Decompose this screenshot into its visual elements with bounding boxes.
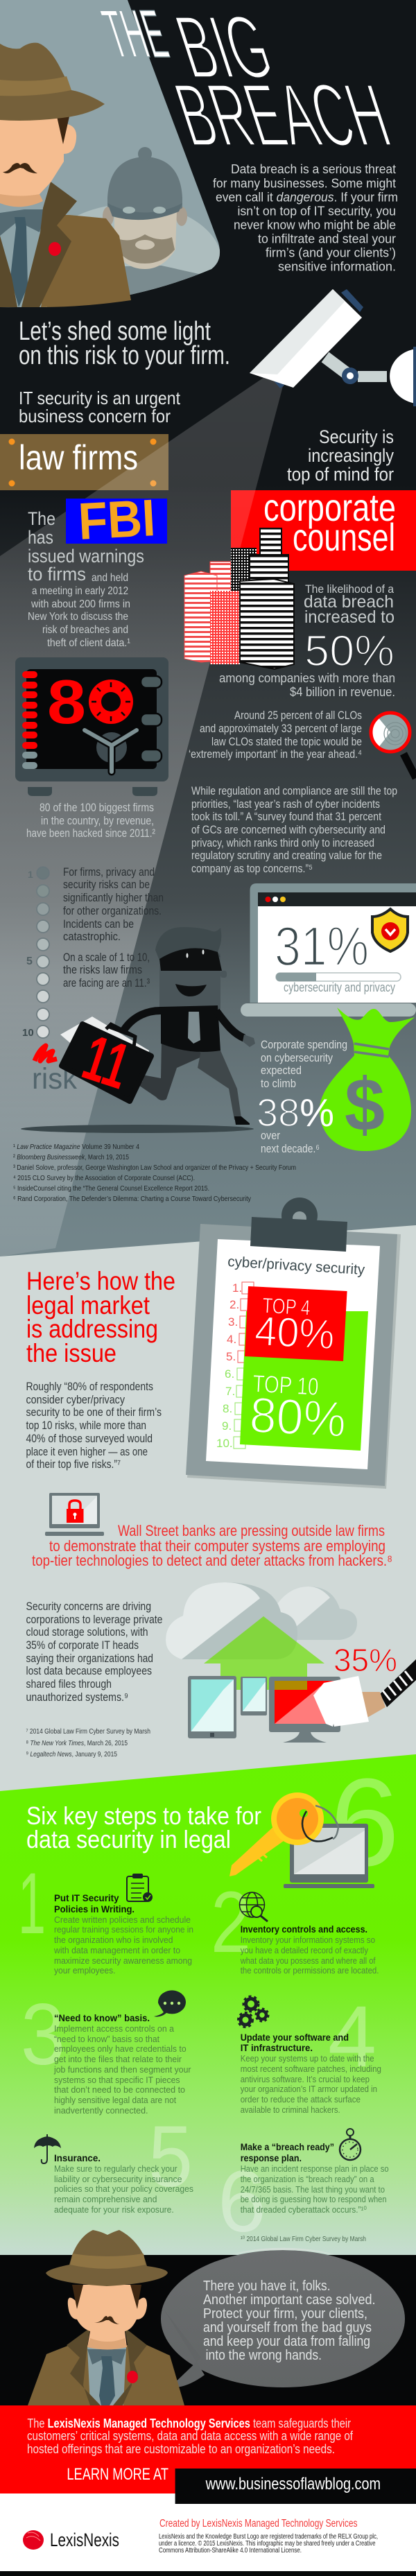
text: regulation and compliance: company as top concerns.”⁵ — [191, 863, 313, 875]
text: security concerns cloud storage: 35% of corporate IT heads — [26, 1639, 139, 1652]
detective figure — [0, 43, 131, 307]
footnotes 1 to 6: ³ Daniel Solove, professor, George Washington Law School and organizer of the Privacy + Security Forum — [13, 1164, 296, 1172]
about LexisNexis text: customers’ critical systems, data and data access with a wide range of — [27, 2429, 354, 2443]
step 1: written policies — [53, 1874, 193, 1976]
red scribble 11th level — [35, 1046, 57, 1061]
step 4: update software: available to criminal hackers. — [241, 2104, 340, 2115]
about LexisNexis text: hosted offerings that are customizable to an organization’s needs. — [27, 2442, 335, 2456]
data breach statistic: 50%: 50% — [304, 627, 395, 675]
heading: how the legal market addresses the issue: Here’s how the — [26, 1267, 175, 1295]
icon: globe with magnifier — [240, 1892, 268, 1921]
website link box: www.businessoflawblog.com — [205, 2475, 381, 2493]
checklist numbers — [216, 1281, 242, 1450]
mustache — [94, 2316, 119, 2324]
checklist numbers: 1. — [232, 1281, 242, 1295]
closing text: and keep your data from falling — [203, 2334, 370, 2349]
corporate counsel banner label — [263, 485, 396, 559]
step 4: update software: order to reduce the attack surface — [241, 2094, 361, 2104]
FBI warning text — [28, 508, 144, 649]
bottom black bar — [0, 2571, 416, 2576]
icon: laptop with padlock — [45, 1493, 104, 1536]
text: roughly 80% of respondents: consider cyber/privacy — [26, 1394, 125, 1406]
text: security concerns cloud storage: cloud storage solutions, with — [26, 1626, 148, 1639]
fedora hat — [0, 43, 105, 121]
about LexisNexis text — [27, 2417, 354, 2456]
text: risks for firms: catastrophic. — [63, 931, 121, 943]
risk scale 1 to 10: 10 — [22, 1027, 34, 1039]
checklist numbers: 8. — [223, 1402, 232, 1415]
step 4: update software: most recent software patches, including — [241, 2064, 381, 2074]
heading: shed some light — [19, 317, 230, 370]
mustache — [3, 163, 37, 173]
heading: six key steps: Six key steps to take for — [26, 1801, 261, 1830]
footer white background — [0, 2493, 416, 2571]
step 4: update software: your organization’s IT armor updated in — [241, 2084, 377, 2094]
step 1: written policies: regular training sessions for anyone in — [54, 1924, 193, 1935]
large ghost numerals: 1 — [18, 1856, 46, 1952]
text: risks for firms: On a scale of 1 to 10, — [63, 951, 150, 964]
step 2: inventory controls: you have a detailed record of exactly — [241, 1945, 368, 1955]
step 1: written policies: your employees. — [54, 1965, 115, 1976]
step 3: need to know basis: inadvertently connected. — [54, 2105, 148, 2116]
website link box — [175, 2469, 416, 2504]
text: risks for firms: for other organizations. — [63, 905, 162, 917]
text: CLO survey: Around 25 percent of all CLOs — [234, 709, 362, 722]
light beam from camera — [0, 374, 283, 1256]
step 3: need to know basis: employees only have credentials to — [54, 2043, 187, 2054]
banner: law firms background — [0, 434, 168, 490]
icon: money bag: $ — [345, 1062, 385, 1146]
text: security concerns cloud storage: shared files through — [26, 1678, 112, 1691]
text: risks for firms — [63, 866, 164, 989]
closing text: There you have it, folks. — [203, 2279, 330, 2294]
step 6: breach ready response plan: response plan. — [241, 2152, 302, 2163]
step 3: need to know basis — [53, 1990, 191, 2116]
title — [95, 0, 401, 164]
text: regulation and compliance: priorities, “last year’s rash of cyber incidents — [191, 798, 380, 811]
text: regulation and compliance: of GCs are concerned with cybersecurity and — [191, 824, 385, 836]
text: risks for firms: Incidents can be — [63, 918, 134, 931]
FBI warning text: and held — [92, 572, 128, 584]
top 4 stat: 40% — [254, 1308, 336, 1358]
icon: money bag — [320, 1008, 415, 1151]
banner: corporate counsel background — [231, 490, 416, 571]
risk scale 1 to 10 — [22, 867, 49, 1039]
text: corporate spending 38%: on cybersecurity — [261, 1052, 333, 1064]
step 5: insurance: Make sure to regularly check your — [54, 2163, 177, 2174]
checklist numbers: 7. — [225, 1385, 235, 1398]
text: regulation and compliance: took its toll.” A “survey found that 31 percent — [191, 811, 381, 823]
closing text: Another important case solved. — [203, 2292, 376, 2308]
text: CLO survey — [189, 709, 362, 761]
step 3: need to know basis: “need to know” basis so that — [54, 2034, 159, 2044]
text: security concerns cloud storage — [26, 1600, 162, 1704]
text: roughly 80% of respondents: security to be one of their firm’s — [26, 1406, 162, 1419]
checklist numbers: 5. — [226, 1350, 236, 1363]
intro text: to infiltrate and steal your — [258, 232, 396, 246]
learn more label: LEARN MORE AT — [67, 2465, 168, 2484]
callout: Wall Street banks — [32, 1522, 392, 1569]
step 6: breach ready response plan: 24/7/365 basis. The last thing you want to — [241, 2184, 385, 2195]
checklist numbers: 4. — [227, 1333, 236, 1346]
text: CLO survey: law CLOs stated the topic would be — [211, 736, 362, 748]
footnotes 1 to 6: ⁵ InsideCounsel citing the “The General Counsel Excellence Report 2015. — [13, 1184, 209, 1193]
closing text: and yourself from the bad guys — [203, 2320, 372, 2335]
hand holding paper — [313, 1659, 416, 1727]
data breach statistic: 50%: increased to — [304, 607, 395, 627]
text: corporate spending 38%: to climb — [261, 1078, 296, 1090]
clipboard: cyber/privacy security survey: cyber/privacy security — [227, 1254, 365, 1278]
text: security concerns cloud storage: saying their organizations had — [26, 1652, 153, 1665]
text: security concerns cloud storage: corporations to leverage private — [26, 1614, 162, 1626]
text: risk word: risk — [32, 1062, 77, 1096]
text: risks for firms: the risks law firms — [63, 964, 142, 976]
illustration: running man with briefcase: 11 — [75, 1022, 137, 1103]
FBI warning text: a meeting in early 2012 — [32, 585, 128, 597]
text: roughly 80% of respondents — [26, 1381, 162, 1471]
risk scale 1 to 10: 5 — [26, 956, 33, 967]
step 1: written policies: maximize security awareness among — [54, 1955, 192, 1966]
step 3: need to know basis: that don’t need to be connected to — [54, 2084, 185, 2095]
text: 80 of 100 firms hacked — [26, 802, 155, 840]
text: roughly 80% of respondents: top 10 risks, while more than — [26, 1419, 146, 1432]
intro text: sensitive information. — [278, 260, 396, 274]
step 4: update software: Update your software and — [241, 2032, 349, 2043]
FBI warning text: with about 200 firms in — [31, 598, 130, 610]
step 2: inventory controls: the controls or permissions are located. — [241, 1965, 379, 1976]
closing text: Protect your firm, your clients, — [203, 2306, 367, 2322]
step 1: written policies: Put IT Security — [54, 1892, 119, 1903]
risk scale 1 to 10: 1 — [28, 869, 33, 880]
speech bubble closing — [161, 2248, 405, 2387]
checklist numbers: 9. — [222, 1419, 232, 1433]
data breach statistic: 50% — [219, 582, 395, 699]
briefcase — [62, 1024, 151, 1101]
step 5: insurance: adequate for your risk exposure. — [54, 2204, 174, 2215]
FBI warning text: The — [28, 508, 55, 529]
text: 80 of 100 firms hacked: 80 of the 100 biggest firms — [40, 802, 154, 814]
step 4: update software: Keep your systems up to date with the — [241, 2053, 374, 2064]
heading: shed some light: Let’s shed some light — [19, 317, 211, 346]
text: corporate spending 38%: Corporate spending — [261, 1039, 347, 1051]
credits: Created by LexisNexis Managed Technology Services — [159, 2518, 358, 2530]
intro text: firm’s (and your clients’) — [266, 246, 396, 260]
footnotes 1 to 6: ⁴ 2015 CLO Survey by the Association of Corporate Counsel (ACC). — [13, 1174, 195, 1182]
footnotes 7 to 9: ⁸ The New York Times, March 26, 2015 — [26, 1739, 128, 1747]
subheading: security top of mind: Security is — [319, 426, 394, 447]
title: BIG — [164, 0, 284, 96]
about LexisNexis text: The LexisNexis Managed Technology Services team safeguards their — [27, 2417, 351, 2430]
text: roughly 80% of respondents: place it even higher — as one — [26, 1446, 148, 1458]
text: security concerns cloud storage: unauthorized systems.⁹ — [26, 1691, 128, 1704]
step 4: update software — [239, 1996, 381, 2115]
icon: umbrella — [34, 2134, 61, 2163]
text: corporate spending 38%: 38% — [257, 1091, 334, 1135]
intro text: for many businesses. Some might — [213, 177, 396, 191]
monitor: 31% cybersecurity and privacy — [241, 883, 416, 1017]
illustration: running man with briefcase — [21, 927, 255, 1133]
data breach statistic: 50%: The likelihood of a — [305, 582, 394, 596]
papers in briefcase — [60, 1017, 149, 1082]
desktop monitor — [269, 1677, 340, 1743]
text: regulation and compliance: regulatory scrutiny and creating value for the — [191, 849, 382, 862]
step 6: breach ready response plan — [241, 2129, 389, 2215]
text: security concerns cloud storage: Security concerns are driving — [26, 1600, 151, 1613]
light section background — [0, 1225, 416, 1803]
footnotes 7 to 9: ⁹ Legaltech News, January 9, 2015 — [26, 1750, 117, 1758]
call to action band — [0, 2405, 416, 2493]
black closing section background — [0, 2255, 416, 2405]
monitor: 31% cybersecurity and privacy: 31% — [275, 915, 369, 977]
step 1: written policies: with data management in order to — [53, 1945, 180, 1955]
heading: how the legal market addresses the issue: the issue — [26, 1339, 116, 1367]
intro text — [213, 162, 398, 274]
large ghost numerals — [18, 1753, 399, 2250]
subheading: security top of mind: top of mind for — [287, 464, 394, 485]
subheading: security top of mind: increasingly — [308, 445, 394, 466]
LexisNexis logo: LexisNexis — [50, 2530, 119, 2550]
step 5: insurance: Insurance. — [54, 2152, 101, 2163]
heading: six key steps — [26, 1801, 261, 1853]
text: corporate spending 38%: expected — [261, 1064, 302, 1077]
icon: clipboard check — [127, 1874, 153, 1902]
icon: magnifying glass with fingerprint — [371, 713, 416, 778]
text: CLO survey: and approximately 33 percent of large — [200, 723, 362, 735]
heading: shed some light: on this risk to your firm. — [19, 341, 230, 370]
FBI warning text: has — [28, 527, 53, 548]
icon: key and laptop — [229, 1792, 374, 1888]
subheading: law firms concern — [19, 388, 181, 426]
data breach statistic: 50%: data breach — [304, 592, 394, 612]
closing text — [203, 2279, 376, 2363]
FBI warning text: to firms — [28, 564, 86, 585]
text: roughly 80% of respondents: Roughly “80% of respondents — [26, 1381, 153, 1393]
icon: speech bubble — [154, 1990, 186, 2016]
large ghost numerals: 2 — [211, 1874, 251, 1971]
text: roughly 80% of respondents: 40% of those surveyed would — [26, 1433, 153, 1445]
lapel pin — [49, 242, 61, 256]
step 3: need to know basis: Implement access controls on a — [54, 2023, 175, 2034]
step 6: breach ready response plan: Have an incident response plan in place so — [241, 2163, 389, 2174]
credits: Commons Attribution-ShareAlike 4.0 International License. — [159, 2547, 302, 2555]
footnotes 1 to 6: ⁶ Rand Corporation, The Defender’s Dilemma: Charting a Course Toward Cybersecurity — [13, 1195, 252, 1203]
text: 80 of 100 firms hacked: in the country, by revenue, — [41, 815, 154, 827]
checklist numbers: 10. — [216, 1437, 233, 1450]
credits — [159, 2518, 378, 2555]
step 3: need to know basis: “Need to know” basis. — [54, 2012, 150, 2023]
illustration: detective closing — [28, 2230, 184, 2405]
subheading: law firms concern: business concern for — [19, 406, 171, 426]
top 10 stat: 80% — [248, 1388, 347, 1448]
step 5: insurance: liability or cybersecurity insurance — [54, 2174, 182, 2184]
heading: how the legal market addresses the issue: legal market — [26, 1291, 150, 1320]
text: regulation and compliance: privacy, which ranks third only to increased — [191, 837, 374, 849]
illustration: spotlight with detective and thief — [0, 0, 222, 320]
large ghost numerals: 4 — [328, 1989, 376, 2085]
step 5: insurance — [34, 2134, 193, 2215]
illustration: cloud, devices and upload arrow — [166, 1582, 416, 1743]
text: risks for firms: security risks can be — [63, 879, 150, 891]
heading: six key steps: data security in legal — [26, 1825, 231, 1853]
intro text: Data breach is a serious threat — [231, 162, 396, 176]
tablet — [188, 1676, 236, 1738]
footnotes 7 to 9 — [26, 1727, 150, 1758]
step 3: need to know basis: job functions and then segment your — [53, 2064, 191, 2075]
icon: security camera — [250, 289, 416, 406]
step 3: need to know basis: get into the files that relate to their — [54, 2054, 182, 2064]
thief figure — [103, 147, 199, 295]
data breach statistic: 50%: $4 billion in revenue. — [290, 685, 395, 699]
step 2: inventory controls: what data you possess and where all of — [240, 1955, 376, 1966]
law firms banner label: law firms — [19, 438, 138, 477]
green six steps section background — [0, 1754, 416, 2255]
top 10 stat: TOP 10 — [252, 1370, 319, 1401]
step 2: inventory controls: Inventory controls and access. — [241, 1924, 367, 1935]
icon: city buildings — [184, 528, 294, 669]
intro text: even call it dangerous. If your firm — [216, 191, 398, 205]
footnote 10: ¹⁰ 2014 Global Law Firm Cyber Survey by Marsh — [241, 2235, 366, 2243]
icon: vault safe with 80: 8 — [47, 668, 86, 737]
heading: how the legal market addresses the issue: is addressing — [26, 1315, 158, 1343]
top 4 stat: TOP 4 — [262, 1293, 311, 1320]
large ghost numerals: 6 — [218, 2154, 266, 2250]
LexisNexis logo — [23, 2530, 119, 2550]
text: corporate spending 38% — [257, 1039, 347, 1155]
FBI warning text: risk of breaches and — [42, 624, 128, 636]
icon: stopwatch — [340, 2129, 361, 2160]
text: roughly 80% of respondents: of their top five risks.”⁷ — [26, 1458, 121, 1471]
large ghost numerals: 5 — [148, 2109, 193, 2205]
text: regulation and compliance — [191, 785, 397, 875]
footnotes 1 to 6: ¹ Law Practice Magazine Volume 39 Number 4 — [13, 1143, 139, 1151]
intro text: never know who might be able — [234, 218, 396, 232]
FBI warning text: New York to discuss the — [28, 611, 128, 623]
text: risks for firms: are facing are an 11.³ — [63, 977, 150, 989]
step 5: insurance: policies so that your policy coverages — [54, 2184, 193, 2194]
closing text: into the wrong hands. — [206, 2348, 322, 2363]
data breach statistic: 50%: among companies with more than — [219, 671, 395, 685]
text: CLO survey: ‘extremely important’ in the year ahead.⁴ — [189, 748, 362, 761]
icon: shield — [372, 909, 408, 951]
step 3: need to know basis: highly sensitive legal data are not — [54, 2095, 176, 2105]
checklist numbers: 6. — [225, 1367, 234, 1381]
footnotes 7 to 9: ⁷ 2014 Global Law Firm Cyber Survey by Marsh — [26, 1727, 150, 1736]
text: 80 of 100 firms hacked: have been hacked since 2011.² — [26, 827, 155, 840]
step 6: breach ready response plan: Make a “breach ready” — [241, 2141, 334, 2152]
heading: how the legal market addresses the issue — [26, 1267, 175, 1367]
step 4: update software: IT infrastructure. — [241, 2042, 313, 2053]
dark background — [0, 0, 416, 1269]
step 4: update software: antivirus software. It’s crucial to keep — [241, 2074, 370, 2084]
step 6: breach ready response plan: the organization is “breach ready” on a — [241, 2174, 374, 2184]
text: risks for firms: significantly higher than — [63, 892, 164, 904]
subheading: law firms concern: IT security is an urgent — [19, 388, 181, 408]
text: corporate spending 38%: over — [261, 1130, 280, 1142]
step 2: inventory controls: Inventory your information systems so — [241, 1935, 375, 1945]
step 1: written policies: Create written policies and schedule — [54, 1914, 191, 1925]
step 5: insurance: remain comprehensive and — [54, 2194, 157, 2204]
step 2: inventory controls — [240, 1892, 379, 1976]
icon: vault safe with 80 — [15, 657, 168, 796]
clipboard: cyber/privacy security survey — [186, 1198, 401, 1489]
FBI warning text: theft of client data.¹ — [47, 637, 130, 649]
checklist numbers: 3. — [228, 1315, 238, 1329]
phone — [241, 1677, 267, 1715]
step 6: breach ready response plan: that dreaded cyberattack occurs.”¹⁰ — [241, 2204, 367, 2215]
large ghost numerals: 6 — [330, 1753, 399, 1892]
step 1: written policies: the organization who is involved — [54, 1935, 173, 1945]
FBI warning text: issued warnings — [28, 546, 144, 567]
text: security concerns cloud storage: lost data because employees — [26, 1665, 152, 1677]
footnotes 1 to 6: ² Bloomberg Businessweek, March 19, 2015 — [13, 1153, 129, 1161]
checklist numbers: 2. — [229, 1298, 239, 1311]
icon: gears — [239, 1996, 268, 2028]
large ghost numerals: 3 — [21, 1987, 65, 2083]
text: risks for firms: For firms, privacy and — [63, 866, 155, 879]
step 3: need to know basis: systems so that specific IT pieces — [54, 2075, 180, 2085]
step 6: breach ready response plan: be doing is guessing how to respond when — [241, 2194, 387, 2204]
FBI badge: FBI — [77, 488, 157, 551]
text: corporate spending 38%: next decade.⁶ — [261, 1143, 320, 1155]
step 1: written policies: Policies in Writing. — [54, 1903, 135, 1914]
illustration: cloud, devices and upload arrow: 35% — [333, 1642, 397, 1678]
intro text: isn’t on top of IT security, you — [237, 205, 396, 218]
subheading: security top of mind — [287, 426, 394, 485]
fedora hat — [46, 2230, 168, 2286]
footnotes 1 to 6 — [13, 1143, 296, 1203]
